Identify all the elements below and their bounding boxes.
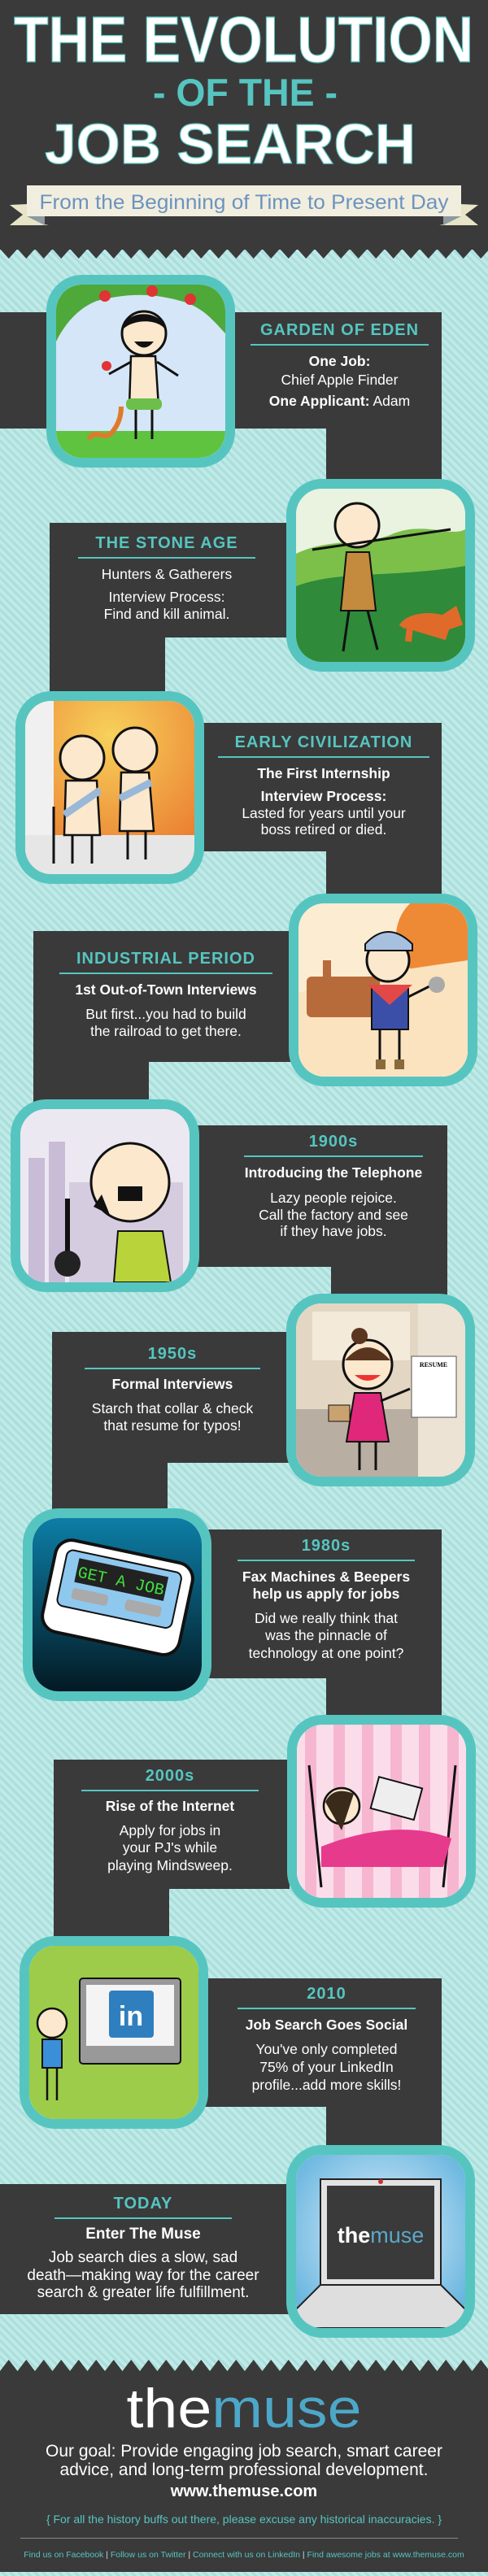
- text: 2010: [237, 1985, 416, 2093]
- text: your PJ's while: [123, 1839, 217, 1856]
- title: [14, 3, 473, 171]
- footer url: www.themuse.com: [171, 2482, 317, 2500]
- footer links: Find us on Facebook | Follow us on Twitter | Connect with us on LinkedIn | Find awesome jobs at www.themuse.com: [24, 2550, 464, 2560]
- panel: early civilization image: [15, 691, 204, 884]
- text: Apply for jobs in: [120, 1822, 220, 1838]
- ribbon subtitle: [10, 185, 478, 225]
- text: TODAY: [114, 2195, 172, 2213]
- panel: stone age image: [286, 479, 475, 672]
- footer disclaimer: { For all the history buffs out there, please excuse any historical inaccuracies. }: [46, 2513, 442, 2526]
- text: the railroad to get there.: [90, 1023, 242, 1039]
- text: Did we really think that: [255, 1610, 398, 1626]
- text: that resume for typos!: [103, 1417, 242, 1434]
- panel: 1900s image: [11, 1099, 199, 1292]
- footer goal text: Our goal: Provide engaging job search, smart career: [46, 2442, 442, 2461]
- panel: 1950s image: [286, 1294, 475, 1486]
- panel: 1980s image: [23, 1508, 211, 1701]
- panel: 1950s image: RESUME: [420, 1361, 447, 1368]
- text: Introducing the Telephone: [245, 1164, 422, 1181]
- text: Lazy people rejoice.: [270, 1190, 397, 1206]
- panel: industrial period image: [289, 894, 477, 1086]
- text: 2000s: [81, 1767, 259, 1873]
- text: profile...add more skills!: [252, 2077, 401, 2093]
- text: Lasted for years until your: [242, 805, 406, 821]
- ribbon subtitle: From the Beginning of Time to Present Day: [39, 191, 449, 214]
- text: Formal Interviews: [112, 1376, 233, 1392]
- panel: today image: themuse: [338, 2223, 424, 2247]
- text: EARLY CIVILIZATION: [235, 733, 412, 751]
- text: 1900s: [309, 1133, 358, 1151]
- text: Find and kill animal.: [104, 606, 229, 622]
- text: Enter The Muse: [85, 2226, 201, 2243]
- text: But first...you had to build: [85, 1006, 246, 1022]
- text: Call the factory and see: [259, 1207, 408, 1223]
- text: One Job:: [309, 353, 370, 369]
- text: Job Search Goes Social: [246, 2017, 407, 2033]
- text: 1st Out-of-Town Interviews: [75, 981, 257, 998]
- text: Fax Machines & Beepers: [242, 1569, 410, 1585]
- text: 1980s: [302, 1537, 351, 1555]
- text: The First Internship: [257, 765, 390, 781]
- footer goal text: advice, and long-term professional development.: [60, 2461, 428, 2479]
- text: today: [27, 2195, 259, 2301]
- header background: [0, 0, 488, 259]
- text: death—making way for the career: [27, 2267, 259, 2284]
- text: Job search dies a slow, sad: [49, 2249, 237, 2266]
- text: early civilization: [218, 733, 429, 838]
- text: GARDEN OF EDEN: [260, 321, 419, 339]
- text: 75% of your LinkedIn: [259, 2059, 394, 2075]
- footer goal text: [46, 2442, 442, 2479]
- text: 1950s: [85, 1345, 260, 1434]
- dark connector bands: [0, 312, 442, 429]
- panel: today image: [286, 2145, 475, 2338]
- footer background: [0, 2360, 488, 2572]
- text: You've only completed: [256, 2041, 397, 2057]
- text: if they have jobs.: [280, 1223, 387, 1239]
- panel: 2000s image: [287, 1715, 476, 1908]
- text: search & greater life fulfillment.: [37, 2284, 249, 2301]
- text: industrial period: [59, 950, 272, 1039]
- text: 1950s: [148, 1345, 197, 1363]
- text: 1900s: [244, 1133, 423, 1239]
- text: boss retired or died.: [261, 821, 386, 838]
- panel: 1980s image: GET A JOB: [76, 1564, 166, 1600]
- text: was the pinnacle of: [265, 1627, 387, 1643]
- text: stone age: [78, 534, 255, 622]
- panel: garden of eden image: [46, 275, 235, 468]
- text: technology at one point?: [249, 1645, 403, 1661]
- panel: 2010 image: [20, 1936, 208, 2129]
- text: Interview Process:: [109, 589, 224, 605]
- text: garden of eden: [251, 321, 429, 409]
- text: INDUSTRIAL PERIOD: [76, 950, 255, 968]
- text: 2000s: [146, 1767, 194, 1785]
- title: - OF THE -: [153, 71, 338, 114]
- text: THE STONE AGE: [95, 534, 238, 552]
- panel: 2010 image: in: [119, 2001, 143, 2032]
- text: One Applicant: Adam: [269, 393, 410, 409]
- text: 2010: [307, 1985, 346, 2003]
- text: Interview Process:: [261, 788, 386, 804]
- text: 1980s: [237, 1537, 415, 1661]
- text: help us apply for jobs: [253, 1586, 399, 1602]
- text: Chief Apple Finder: [281, 372, 398, 388]
- text: playing Mindsweep.: [107, 1857, 233, 1873]
- text: Starch that collar & check: [92, 1400, 253, 1416]
- text: Rise of the Internet: [106, 1798, 234, 1814]
- text: Hunters & Gatherers: [102, 566, 232, 582]
